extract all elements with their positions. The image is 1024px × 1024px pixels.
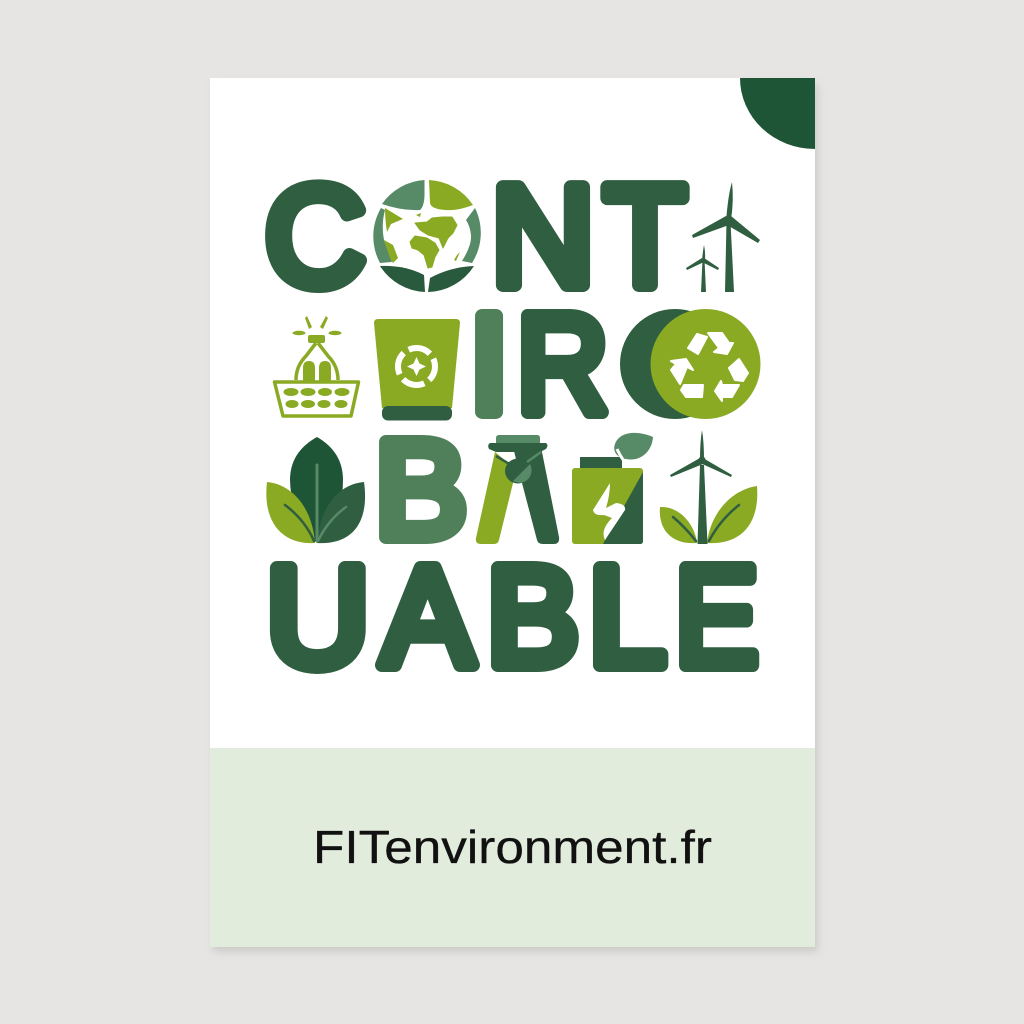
row 3: leaves, B, funnel A, battery, turbine with leaves (266, 412, 757, 567)
icon: leaves (266, 437, 365, 543)
icon: recycling O (620, 309, 760, 419)
icon: battery with leaf (572, 433, 653, 544)
corner quarter circle (740, 78, 815, 149)
letter U: U (266, 538, 370, 696)
icon: basket (274, 316, 358, 416)
letter B: B (375, 412, 467, 567)
poster (210, 78, 815, 947)
icon: globe as letter O (373, 180, 481, 292)
icon: recycling bin (374, 319, 460, 420)
letter E: E (675, 538, 758, 696)
row 4: UABLE (266, 537, 758, 696)
poster sheet (210, 78, 815, 947)
row 2: basket, bin, I, R and recycling O (274, 286, 760, 442)
letter C: C (265, 157, 365, 315)
letter N: N (491, 157, 595, 316)
letter R: R (517, 286, 608, 442)
letter T: T (604, 157, 686, 316)
row 1: CONT with globe and wind turbines (265, 157, 760, 316)
footer band (210, 748, 815, 947)
letter I: I (469, 286, 509, 442)
icon: turbine with leaves (660, 430, 757, 544)
letter B: B (486, 537, 579, 695)
letter L: L (588, 537, 666, 695)
letter A: A (382, 538, 473, 695)
website address: FITenvironment.fr (313, 821, 712, 873)
icon: funnel as letter A (476, 435, 559, 544)
icon: wind turbines (686, 182, 760, 292)
poster shadow (213, 84, 818, 952)
